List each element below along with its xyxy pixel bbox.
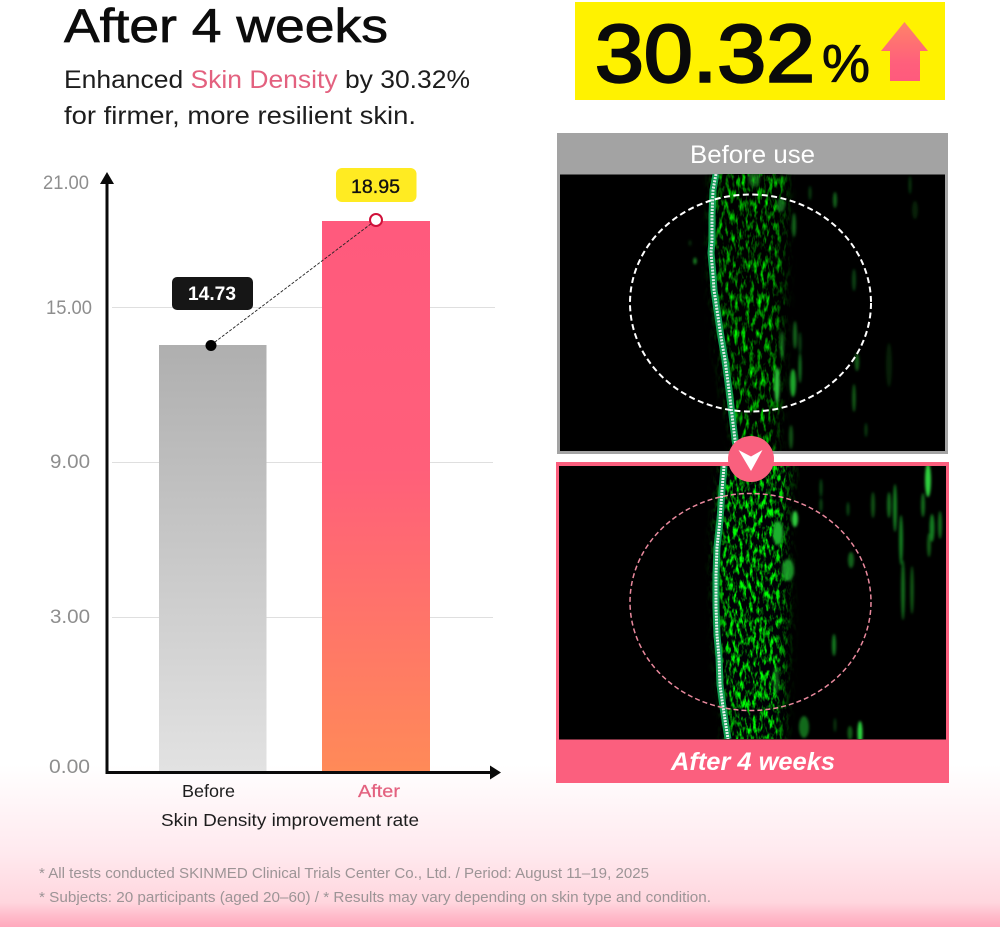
footnotes: * All tests conducted SKINMED Clinical Trials Center Co., Ltd. / Period: August 11–19, 2025: [39, 866, 649, 882]
marker: after: [370, 214, 382, 226]
footnotes: [39, 866, 711, 906]
icon: up arrow: [881, 22, 928, 81]
callout: 30.32% increase: %: [822, 34, 870, 94]
dashed ellipse: after: [630, 494, 871, 710]
subtitle text block: Enhanced Skin Density by 30.32%: [64, 66, 470, 94]
y-axis labels: 9.00: [50, 451, 90, 473]
caption: after 4 weeks: After 4 weeks: [670, 748, 835, 776]
bar chart: skin density: [43, 168, 501, 830]
dashed connector: [211, 220, 376, 345]
marker: before: [206, 340, 216, 351]
y-axis labels: 21.00: [43, 172, 89, 194]
scan image: before: [688, 169, 918, 451]
x-axis labels: Skin Density improvement rate: [161, 810, 419, 830]
callout: 30.32% increase: 30.32: [595, 8, 815, 100]
subtitle text block: for firmer, more resilient skin.: [64, 102, 416, 130]
bar: before: [159, 345, 266, 771]
y-axis labels: 0.00: [49, 756, 90, 778]
y-axis labels: 15.00: [46, 297, 92, 319]
x-axis labels: After: [358, 781, 400, 801]
icon: down arrow between panels: [728, 436, 774, 482]
dashed ellipse: before: [630, 194, 871, 412]
bar: after: [322, 221, 430, 771]
y-axis labels: 3.00: [50, 606, 90, 628]
subtitle text block: [64, 66, 470, 130]
value badge: 18.95: 18.95: [351, 176, 400, 198]
heading: before use: Before use: [690, 141, 815, 169]
callout: 30.32% increase: [575, 2, 945, 100]
axes: [100, 172, 501, 780]
panel: after 4 weeks: [556, 462, 949, 783]
title: After 4 weeks: [64, 0, 388, 52]
scan image: after: [700, 463, 942, 745]
y-axis labels: [43, 172, 92, 778]
footnotes: * Subjects: 20 participants (aged 20–60) / * Results may vary depending on skin type and condition.: [39, 890, 711, 906]
value badge: 18.95: [336, 168, 416, 202]
value badge: 14.73: 14.73: [188, 283, 236, 305]
value badge: 14.73: [172, 277, 253, 310]
panel: before use: [557, 133, 948, 454]
x-axis labels: [161, 781, 419, 830]
x-axis labels: Before: [182, 781, 235, 801]
